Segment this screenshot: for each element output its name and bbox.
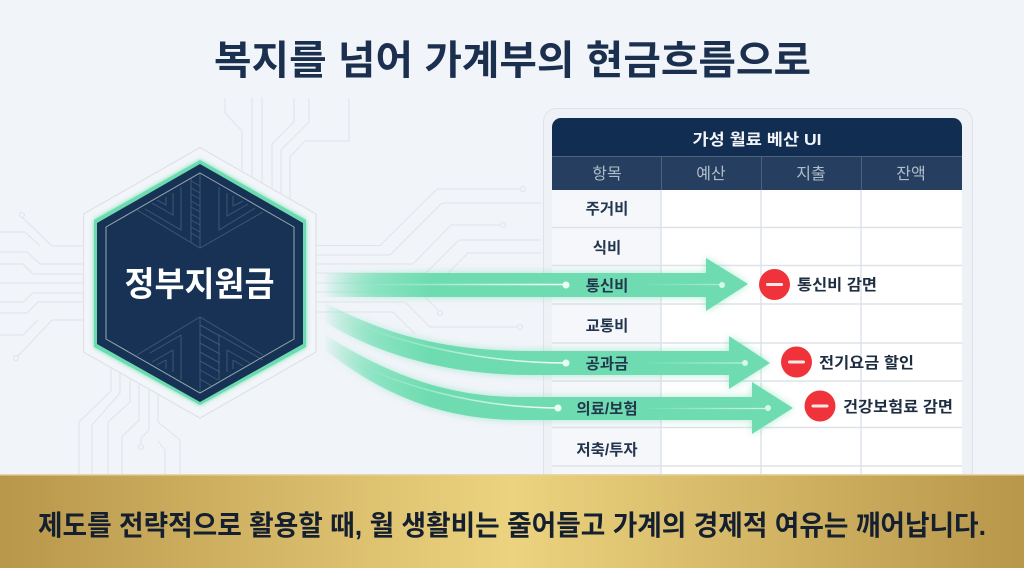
arrow: 의료/보험 [325,335,793,434]
table column headers: 지출 [796,165,826,183]
table row labels: 의료/보험 [576,400,638,418]
table row labels: 교통비 [586,317,628,335]
table title bar: 가성 월료 베산 UI [692,131,822,149]
table row labels [576,200,638,459]
hexagon: government subsidy [84,148,316,418]
table row labels: 저축/투자 [576,441,638,459]
table row labels: 주거비 [586,200,628,218]
table row labels: 공과금 [586,355,628,373]
arrow: 공과금 [325,303,770,389]
table row labels: 통신비 [586,277,628,295]
circuit board lines [0,97,541,475]
hexagon label: 정부지원금 [124,266,274,304]
callout: 전기요금 할인 [781,346,914,378]
table body [552,190,962,480]
table column headers: 잔액 [896,165,926,183]
callout: 전기요금 할인: 전기요금 할인 [819,354,914,372]
callout: 통신비 감면: 통신비 감면 [797,276,877,294]
arrow: 통신비 [322,258,748,311]
title: 복지를 넘어 가계부의 현금흐름으로 [214,39,811,83]
footer banner [0,474,1024,568]
callout: 통신비 감면 [759,269,877,300]
callout: 건강보험료 감면: 건강보험료 감면 [843,398,953,416]
callout: 건강보험료 감면 [804,390,953,422]
table column headers [552,156,962,190]
table row labels: 식비 [593,239,621,257]
arrow glow [322,258,793,434]
panel: budget UI card [544,108,972,488]
table column headers: 예산 [696,165,726,183]
table column headers: 항목 [592,165,622,183]
table title bar [552,118,962,156]
footer text: 제도를 전략적으로 활용할 때, 월 생활비는 줄어들고 가계의 경제적 여유는 깨어납니다. [38,510,986,541]
